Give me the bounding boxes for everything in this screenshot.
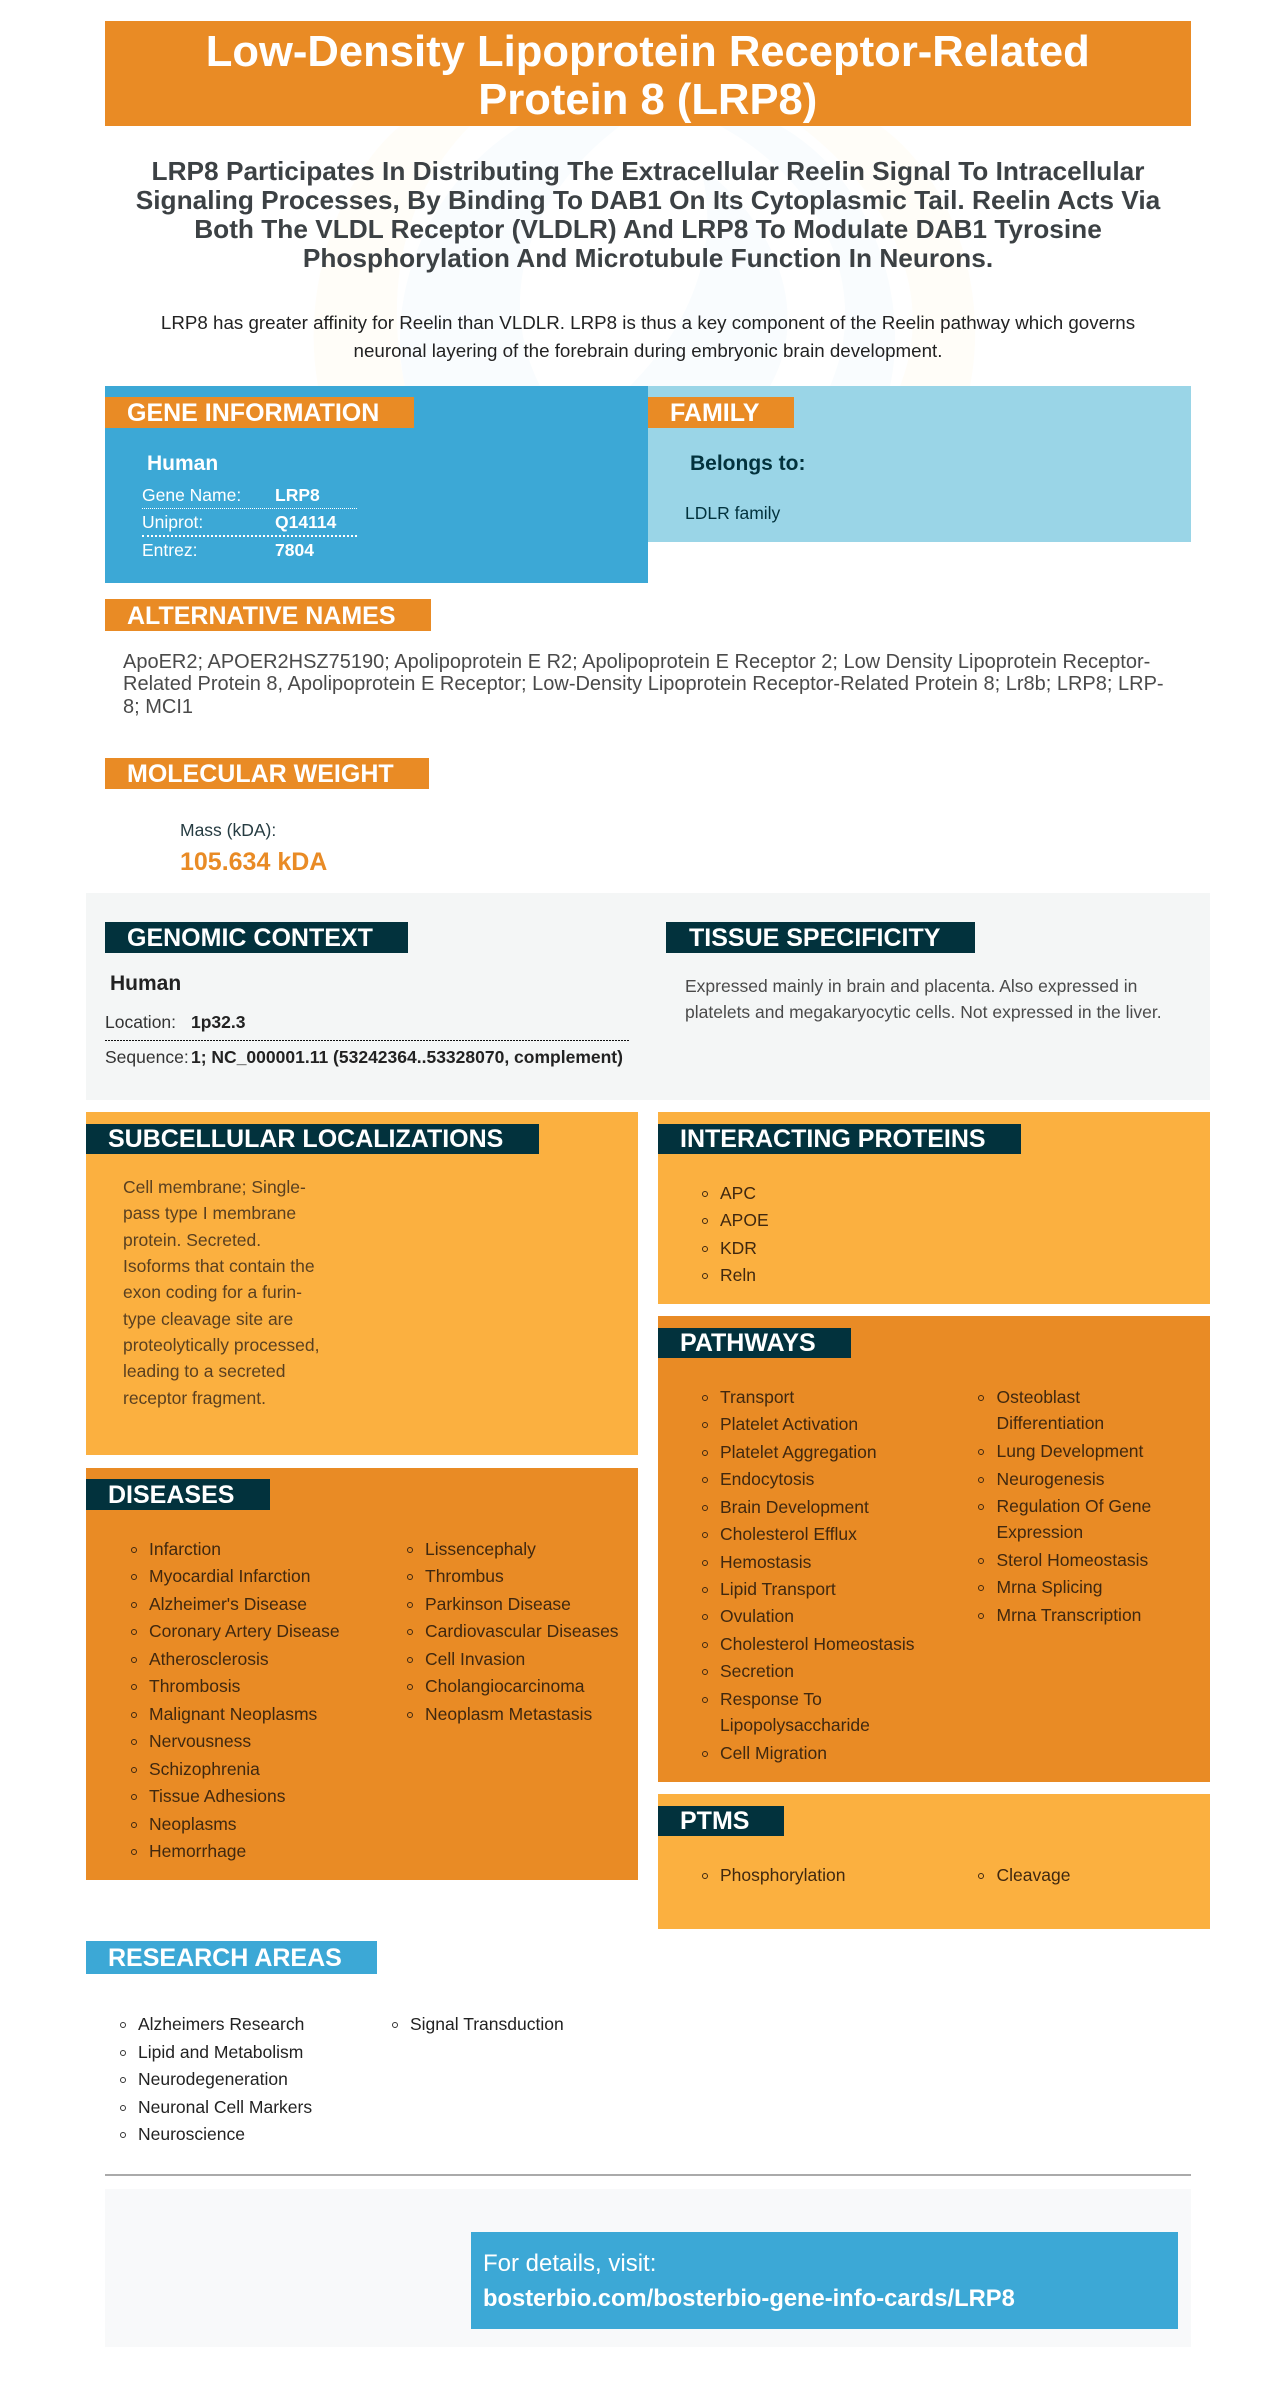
list: pathways column 1: Platelet Aggregation — [720, 1442, 877, 1462]
list: pathways column 1: Brain Development — [720, 1497, 869, 1517]
list: diseases column 1: Malignant Neoplasms — [149, 1704, 317, 1724]
subtitle: Phosphorylation And Microtubule Function In Neurons. — [303, 243, 993, 273]
callout: details link — [471, 2232, 1178, 2329]
callout url: bosterbio.com/bosterbio-gene-info-cards/LRP8 — [483, 2285, 1015, 2312]
heading: tissue specificity: TISSUE SPECIFICITY — [689, 924, 940, 952]
uniprot row: Uniprot: — [142, 512, 203, 532]
entrez row: 7804 — [275, 540, 314, 560]
list: pathways column 1: Hemostasis — [720, 1552, 811, 1572]
list: pathways column 2: Mrna Splicing — [996, 1577, 1103, 1597]
list: pathways column 1: Cholesterol Homeostasis — [720, 1634, 915, 1654]
panel: interacting proteins — [658, 1112, 1210, 1304]
localization text: protein. Secreted. — [123, 1230, 261, 1250]
list: pathways column 1: Cholesterol Efflux — [720, 1524, 857, 1544]
localization text: type cleavage site are — [123, 1309, 293, 1329]
list: diseases column 1: Neoplasms — [149, 1814, 237, 1834]
list: diseases column 1: Coronary Artery Disease — [149, 1621, 340, 1641]
heading: alternative names: ALTERNATIVE NAMES — [127, 602, 396, 630]
subtitle: LRP8 Participates In Distributing The Extracellular Reelin Signal To Intracellular — [152, 156, 1144, 186]
title: Low-Density Lipoprotein Receptor-Related — [206, 28, 1090, 76]
list: diseases column 2: Neoplasm Metastasis — [425, 1704, 592, 1724]
subtitle — [136, 156, 1160, 273]
list: diseases column 1: Hemorrhage — [149, 1841, 246, 1861]
list: pathways column 1: Response To — [720, 1689, 822, 1709]
panel: subcellular localizations — [86, 1112, 638, 1454]
panel: pathways — [658, 1316, 1210, 1782]
species label: Human — [110, 972, 181, 995]
title — [206, 28, 1090, 124]
heading: family: FAMILY — [670, 399, 759, 427]
list: diseases column 2: Thrombus — [425, 1566, 504, 1586]
heading: ptms: PTMS — [680, 1807, 749, 1835]
list: pathways column 2: Sterol Homeostasis — [996, 1550, 1148, 1570]
location row: Location: — [105, 1012, 176, 1032]
sequence row: Sequence: — [105, 1047, 189, 1067]
list: research areas column 1 — [120, 2014, 312, 2144]
list: diseases column 1: Atherosclerosis — [149, 1649, 269, 1669]
species label: Human — [147, 452, 218, 475]
sequence row: 1; NC_000001.11 (53242364..53328070, complement) — [191, 1047, 623, 1067]
heading: ptms — [658, 1806, 784, 1836]
tissue specificity text — [685, 976, 1162, 1022]
list: pathways column 1: Cell Migration — [720, 1743, 827, 1763]
list: pathways column 2: Osteoblast — [996, 1387, 1080, 1407]
intro text — [161, 312, 1135, 361]
list: pathways column 1: Transport — [720, 1387, 794, 1407]
list: research areas column 1: Neuronal Cell Markers — [138, 2097, 312, 2117]
list: diseases column 2: Cholangiocarcinoma — [425, 1676, 585, 1696]
list: pathways column 1: Lipid Transport — [720, 1579, 836, 1599]
list: ptms: Cleavage — [996, 1865, 1070, 1885]
list: diseases column 1: Thrombosis — [149, 1676, 240, 1696]
list: proteins: APC — [720, 1183, 756, 1203]
list: proteins: Reln — [720, 1265, 756, 1285]
intro text: LRP8 has greater affinity for Reelin than VLDLR. LRP8 is thus a key component of the Reelin pathway which governs — [161, 312, 1135, 333]
tissue specificity text: platelets and megakaryocytic cells. Not expressed in the liver. — [685, 1002, 1162, 1022]
heading: diseases: DISEASES — [108, 1481, 234, 1509]
list: pathways column 2: Differentiation — [996, 1413, 1104, 1433]
list: diseases column 2: Lissencephaly — [425, 1539, 536, 1559]
list: pathways column 2: Expression — [996, 1522, 1083, 1542]
list: pathways column 2: Lung Development — [996, 1441, 1143, 1461]
heading: genomic context: GENOMIC CONTEXT — [127, 924, 373, 952]
entrez row — [142, 540, 314, 560]
entrez row: Entrez: — [142, 540, 197, 560]
list: diseases column 2: Parkinson Disease — [425, 1594, 571, 1614]
localization text: proteolytically processed, — [123, 1335, 319, 1355]
heading: family — [648, 397, 794, 428]
alternative names text: 8; MCI1 — [123, 696, 193, 718]
uniprot row: Q14114 — [275, 512, 336, 532]
list: ptms: Phosphorylation — [720, 1865, 846, 1885]
location row — [105, 1012, 245, 1032]
gene name row: Gene Name: — [142, 485, 241, 505]
alternative names text: ApoER2; APOER2HSZ75190; Apolipoprotein E R2; Apolipoprotein E Receptor 2; Low Density Lipoprotein Receptor- — [123, 651, 1150, 673]
gene name row — [142, 485, 320, 505]
panel: genomic context and tissue specificity — [86, 893, 1210, 1100]
list: diseases column 1: Schizophrenia — [149, 1759, 260, 1779]
heading: gene information: GENE INFORMATION — [127, 399, 379, 427]
localization text: exon coding for a furin- — [123, 1282, 302, 1302]
callout label: For details, visit: — [483, 2250, 656, 2277]
panel: family — [648, 386, 1190, 542]
localization text: Isoforms that contain the — [123, 1256, 315, 1276]
list: proteins — [702, 1183, 769, 1285]
heading: research areas: RESEARCH AREAS — [108, 1944, 342, 1972]
list: pathways column 2: Regulation Of Gene — [996, 1496, 1151, 1516]
list: diseases column 1: Myocardial Infarction — [149, 1566, 310, 1586]
heading: research areas — [86, 1941, 377, 1974]
mass value: 105.634 kDA — [180, 848, 327, 876]
list: diseases column 2: Cell Invasion — [425, 1649, 525, 1669]
mass label: Mass (kDA): — [180, 820, 276, 840]
list: pathways column 1 — [702, 1387, 915, 1763]
list: pathways column 1: Ovulation — [720, 1606, 794, 1626]
panel: diseases — [86, 1468, 638, 1880]
localization text: receptor fragment. — [123, 1388, 266, 1408]
list: pathways column 1: Endocytosis — [720, 1469, 814, 1489]
heading: interacting proteins: INTERACTING PROTEINS — [680, 1125, 986, 1153]
title: Protein 8 (LRP8) — [478, 76, 817, 124]
localization text: pass type I membrane — [123, 1203, 296, 1223]
list: diseases column 1: Nervousness — [149, 1731, 251, 1751]
heading: pathways — [658, 1328, 851, 1358]
list: research areas column 1: Alzheimers Research — [138, 2014, 304, 2034]
list: pathways column 1: Secretion — [720, 1661, 794, 1681]
list: research areas column 1: Neurodegeneration — [138, 2069, 288, 2089]
list: diseases column 1: Infarction — [149, 1539, 221, 1559]
list: pathways column 1: Platelet Activation — [720, 1414, 858, 1434]
uniprot row — [142, 512, 336, 532]
localization text — [123, 1177, 319, 1408]
list: proteins: KDR — [720, 1238, 757, 1258]
panel: gene information — [105, 386, 648, 583]
panel: genomic context and tissue specificity: 1p32.3 — [191, 1012, 245, 1032]
list: proteins: APOE — [720, 1210, 769, 1230]
panel: ptms — [658, 1794, 1210, 1929]
gene name row: LRP8 — [275, 485, 320, 505]
localization text: Cell membrane; Single- — [123, 1177, 306, 1197]
list: diseases column 2: Cardiovascular Diseases — [425, 1621, 619, 1641]
list: ptms — [702, 1865, 1070, 1885]
alternative names text: Related Protein 8, Apolipoprotein E Receptor; Low-Density Lipoprotein Receptor-Related Protein 8; Lr8b; LRP8; LRP- — [123, 673, 1164, 695]
title banner — [105, 21, 1190, 126]
list: pathways column 2: Neurogenesis — [996, 1469, 1104, 1489]
list: diseases column 1 — [131, 1539, 340, 1861]
subtitle: Both The VLDL Receptor (VLDLR) And LRP8 To Modulate DAB1 Tyrosine — [194, 214, 1102, 244]
intro text: neuronal layering of the forebrain during embryonic brain development. — [354, 340, 942, 361]
list: diseases column 2 — [407, 1539, 619, 1724]
heading: pathways: PATHWAYS — [680, 1329, 816, 1357]
heading: diseases — [86, 1479, 270, 1510]
panel: footer — [105, 2189, 1190, 2347]
list: diseases column 1: Alzheimer's Disease — [149, 1594, 307, 1614]
mass block — [180, 820, 327, 876]
list: pathways column 2 — [978, 1387, 1151, 1625]
background watermark — [300, 126, 1000, 386]
localization text: leading to a secreted — [123, 1361, 285, 1381]
alternative names text — [123, 651, 1164, 718]
list: pathways column 2: Mrna Transcription — [996, 1605, 1141, 1625]
heading: molecular weight: MOLECULAR WEIGHT — [127, 760, 394, 788]
list: research areas column 1: Neuroscience — [138, 2124, 245, 2144]
family value: LDLR family — [685, 503, 780, 523]
subtitle: Signaling Processes, By Binding To DAB1 On Its Cytoplasmic Tail. Reelin Acts Via — [136, 185, 1160, 215]
list: diseases column 1: Tissue Adhesions — [149, 1786, 286, 1806]
list: research areas column 2: Signal Transduction — [410, 2014, 564, 2034]
tissue specificity text: Expressed mainly in brain and placenta. Also expressed in — [685, 976, 1137, 996]
list: research areas column 1: Lipid and Metabolism — [138, 2042, 303, 2062]
list: pathways column 1: Lipopolysaccharide — [720, 1715, 870, 1735]
heading: subcellular localizations: SUBCELLULAR LOCALIZATIONS — [108, 1125, 503, 1153]
belongs to label: Belongs to: — [690, 452, 806, 475]
